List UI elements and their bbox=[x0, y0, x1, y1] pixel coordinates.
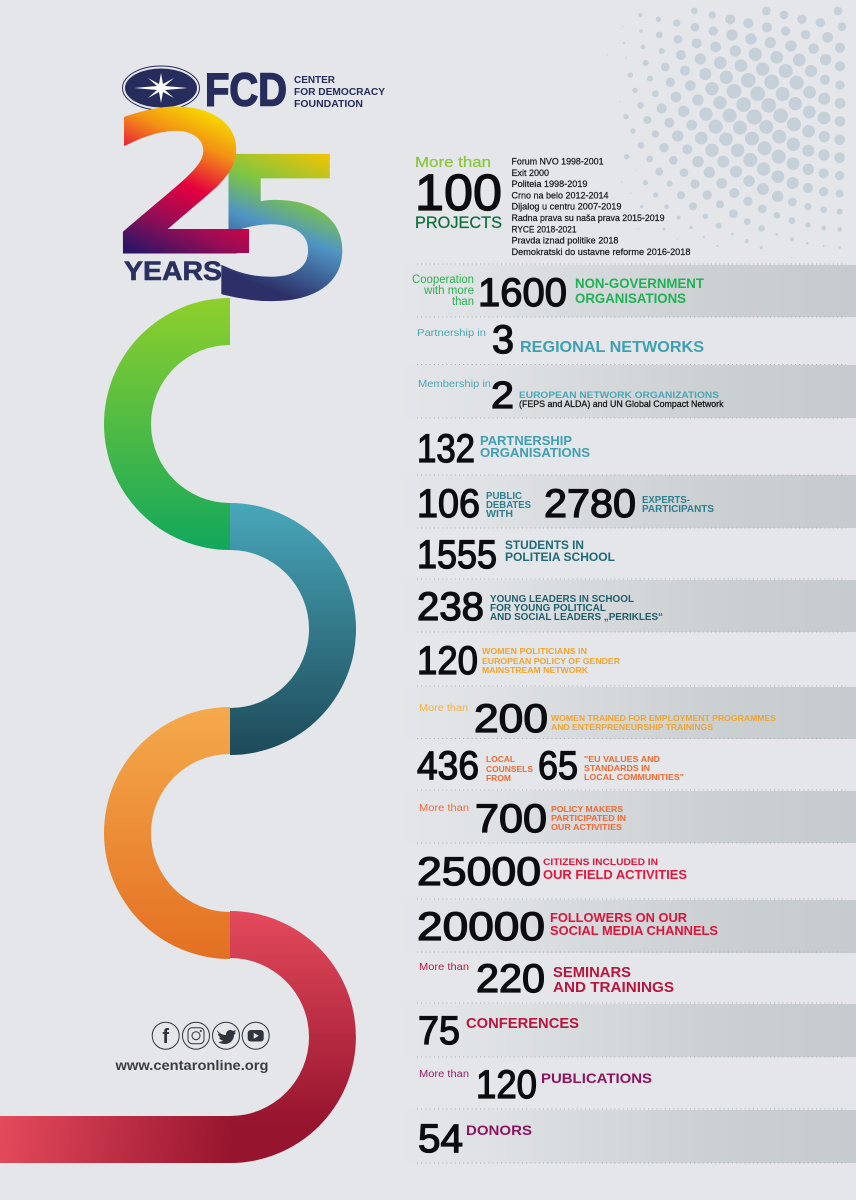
stat: 120 women politicians: 120 bbox=[417, 639, 478, 683]
stat: 436 local counsels from 65 communities bbox=[417, 744, 684, 788]
stat: 1600 NGOs: Cooperation bbox=[412, 274, 474, 286]
stat: more than 200 women trained: More than bbox=[419, 703, 468, 714]
stat: 20000 followers: 20000 bbox=[417, 905, 545, 949]
stat: 238 young leaders bbox=[417, 585, 663, 629]
stat: 436 local counsels from 65 communities: COUNSELS bbox=[486, 764, 533, 774]
stat: 1600 NGOs: ORGANISATIONS bbox=[575, 291, 686, 306]
stat: 436 local counsels from 65 communities: LOCAL COMMUNITIES" bbox=[584, 772, 684, 782]
list of projects: Crno na belo 2012-2014 bbox=[512, 190, 608, 201]
stat: 106 debates, 2780 participants: 2780 bbox=[544, 482, 636, 526]
icon: instagram bbox=[182, 1022, 210, 1049]
stat: 106 debates, 2780 participants bbox=[417, 482, 714, 526]
stat: more than 220 seminars: AND TRAININGS bbox=[553, 980, 674, 996]
stat: 25000 citizens bbox=[417, 850, 687, 894]
stat: more than 700 policy makers: 700 bbox=[475, 797, 547, 841]
stat: more than 700 policy makers bbox=[419, 797, 626, 841]
ribbon: green segment bbox=[104, 298, 230, 550]
stat: 2 European networks bbox=[418, 375, 724, 417]
stat: more than 700 policy makers: More than bbox=[419, 803, 469, 814]
ribbon: red tail bbox=[0, 1116, 231, 1163]
list of projects: Radna prava su naša prava 2015-2019 bbox=[512, 213, 664, 224]
list of projects: Forum NVO 1998-2001 bbox=[512, 156, 604, 168]
logo wordmark FCD: FCD bbox=[205, 64, 287, 116]
stat: more than 200 women trained: WOMEN TRAINED FOR EMPLOYMENT PROGRAMMES bbox=[551, 713, 776, 723]
icon: youtube bbox=[242, 1022, 269, 1049]
stat: more than 220 seminars: SEMINARS bbox=[553, 965, 631, 981]
website address: www.centaronline.org bbox=[114, 1058, 268, 1073]
list of projects: Exit 2000 bbox=[512, 168, 549, 179]
stat: 20000 followers: SOCIAL MEDIA CHANNELS bbox=[550, 924, 718, 938]
list of projects: Demokratski do ustavne reforme 2016-2018 bbox=[512, 247, 690, 258]
stat: 1600 NGOs: 1600 bbox=[478, 271, 567, 315]
halftone dot pattern bbox=[607, 7, 846, 258]
stat: 3 regional networks bbox=[417, 318, 704, 362]
stat: 25000 citizens: 25000 bbox=[417, 850, 541, 894]
stat: more than 100 projects: 100 bbox=[415, 164, 502, 221]
logo organisation name: CENTER bbox=[294, 74, 335, 86]
stat: 1600 NGOs: than bbox=[452, 296, 474, 308]
stat: 106 debates, 2780 participants: PARTICIPANTS bbox=[642, 504, 714, 515]
stat: 1555 students bbox=[417, 533, 615, 577]
stat: more than 200 women trained bbox=[419, 697, 776, 741]
logo: FCD Center for Democracy Foundation bbox=[122, 64, 385, 116]
stat: 238 young leaders: FOR YOUNG POLITICAL bbox=[490, 602, 607, 614]
stat: 1555 students: 1555 bbox=[417, 533, 497, 577]
stat: 120 women politicians: MAINSTREAM NETWORK bbox=[482, 665, 589, 675]
stat: 20000 followers: FOLLOWERS ON OUR bbox=[550, 911, 687, 925]
stat: 132 partnership organisations bbox=[417, 427, 590, 471]
logo organisation name: FOUNDATION bbox=[294, 98, 363, 110]
stat: 132 partnership organisations: ORGANISATIONS bbox=[480, 445, 590, 460]
stat: more than 200 women trained: 200 bbox=[474, 697, 548, 741]
list of projects: Politeia 1998-2019 bbox=[512, 179, 588, 190]
stat: more than 100 projects: More than bbox=[415, 154, 491, 171]
stat: 436 local counsels from 65 communities: 436 bbox=[417, 744, 479, 788]
stat: 54 donors: DONORS bbox=[466, 1122, 532, 1138]
stat: 1600 NGOs bbox=[412, 271, 705, 315]
stat: more than 220 seminars bbox=[419, 957, 674, 1001]
list of projects: Pravda iznad politike 2018 bbox=[512, 236, 618, 247]
stat: 75 conferences: CONFERENCES bbox=[466, 1016, 579, 1032]
stat: 3 regional networks: 3 bbox=[492, 318, 514, 362]
stat: 238 young leaders: YOUNG LEADERS IN SCHOOL bbox=[490, 593, 635, 605]
stat: 106 debates, 2780 participants: 106 bbox=[417, 482, 480, 526]
stat: 238 young leaders: 238 bbox=[417, 585, 484, 629]
stat: 75 conferences: 75 bbox=[418, 1009, 460, 1053]
stat: 1555 students: POLITEIA SCHOOL bbox=[505, 550, 615, 564]
stat: 106 debates, 2780 participants: WITH bbox=[486, 509, 513, 520]
icon: twitter bbox=[212, 1022, 240, 1049]
social media icons bbox=[152, 1022, 269, 1049]
stat: more than 120 publications: More than bbox=[419, 1069, 469, 1080]
icon: facebook: f bbox=[162, 1026, 169, 1048]
stat: 436 local counsels from 65 communities: FROM bbox=[486, 773, 511, 783]
stat: 106 debates, 2780 participants: EXPERTS- bbox=[642, 495, 690, 506]
stat: 3 regional networks: REGIONAL NETWORKS bbox=[520, 339, 704, 356]
list of projects: RYCE 2018-2021 bbox=[512, 224, 576, 235]
stat: 54 donors: 54 bbox=[418, 1117, 463, 1161]
numeral 2: 2 bbox=[112, 76, 254, 293]
stat: 25000 citizens: OUR FIELD ACTIVITIES bbox=[543, 868, 687, 882]
stat: 2 European networks: EUROPEAN NETWORK ORGANIZATIONS bbox=[519, 390, 719, 401]
stat: 1600 NGOs: NON-GOVERNMENT bbox=[575, 276, 705, 291]
icon: star in ellipse bbox=[122, 66, 200, 110]
list of projects bbox=[512, 156, 690, 258]
stat: more than 220 seminars: 220 bbox=[476, 957, 545, 1001]
stat: 132 partnership organisations: PARTNERSHIP bbox=[480, 433, 572, 448]
winding ribbon timeline bbox=[0, 298, 356, 1163]
numeral 5: 5 bbox=[209, 121, 357, 338]
anniversary emblem: 25 years bbox=[112, 76, 357, 338]
stat: 436 local counsels from 65 communities: STANDARDS IN bbox=[584, 763, 650, 773]
stat: 54 donors bbox=[418, 1117, 532, 1161]
stat: 2 European networks: 2 bbox=[491, 375, 514, 417]
stat: 436 local counsels from 65 communities: 65 bbox=[538, 744, 578, 788]
stat: 1600 NGOs: with more bbox=[423, 285, 474, 297]
stat: more than 100 projects: PROJECTS bbox=[415, 213, 502, 232]
stat: more than 120 publications: 120 bbox=[476, 1063, 537, 1107]
stat: 75 conferences bbox=[418, 1009, 579, 1053]
stat: more than 700 policy makers: PARTICIPATED IN bbox=[551, 813, 626, 823]
YEARS label: YEARS bbox=[124, 256, 222, 286]
list of projects: Dijalog u centru 2007-2019 bbox=[512, 202, 622, 213]
stat: 436 local counsels from 65 communities: "EU VALUES AND bbox=[584, 754, 660, 764]
stat: 120 women politicians: EUROPEAN POLICY OF GENDER bbox=[482, 656, 620, 666]
stat: more than 120 publications bbox=[419, 1063, 652, 1107]
stat: 3 regional networks: Partnership in bbox=[417, 327, 486, 339]
stat: 106 debates, 2780 participants: DEBATES bbox=[486, 500, 531, 511]
ribbon: orange segment bbox=[104, 707, 230, 959]
stat: 106 debates, 2780 participants: PUBLIC bbox=[486, 491, 522, 502]
logo organisation name: FOR DEMOCRACY bbox=[294, 86, 385, 98]
stat: more than 700 policy makers: POLICY MAKERS bbox=[551, 804, 623, 814]
stat: 238 young leaders: AND SOCIAL LEADERS „PERIKLES“ bbox=[490, 611, 663, 623]
stat: 20000 followers bbox=[417, 905, 718, 949]
stat: 132 partnership organisations: 132 bbox=[417, 427, 475, 471]
stat: more than 120 publications: PUBLICATIONS bbox=[541, 1070, 652, 1086]
stat: 1555 students: STUDENTS IN bbox=[505, 538, 584, 552]
ribbon: red curve bbox=[230, 911, 356, 1163]
stat: 436 local counsels from 65 communities: LOCAL bbox=[486, 754, 515, 764]
stat: 2 European networks: Membership in bbox=[418, 378, 491, 390]
stat: 120 women politicians bbox=[417, 639, 620, 683]
ribbon: teal segment bbox=[230, 503, 356, 755]
logo organisation name bbox=[294, 74, 385, 110]
stat: 2 European networks: (FEPS and ALDA) and UN Global Compact Network bbox=[519, 399, 724, 409]
stat: more than 700 policy makers: OUR ACTIVITIES bbox=[551, 822, 622, 832]
stat: more than 200 women trained: AND ENTERPRENEURSHIP TRAININGS bbox=[551, 722, 713, 732]
stat: 120 women politicians: WOMEN POLITICIANS IN bbox=[482, 646, 587, 656]
stat: more than 220 seminars: More than bbox=[419, 962, 469, 973]
stat: 25000 citizens: CITIZENS INCLUDED IN bbox=[543, 857, 658, 868]
